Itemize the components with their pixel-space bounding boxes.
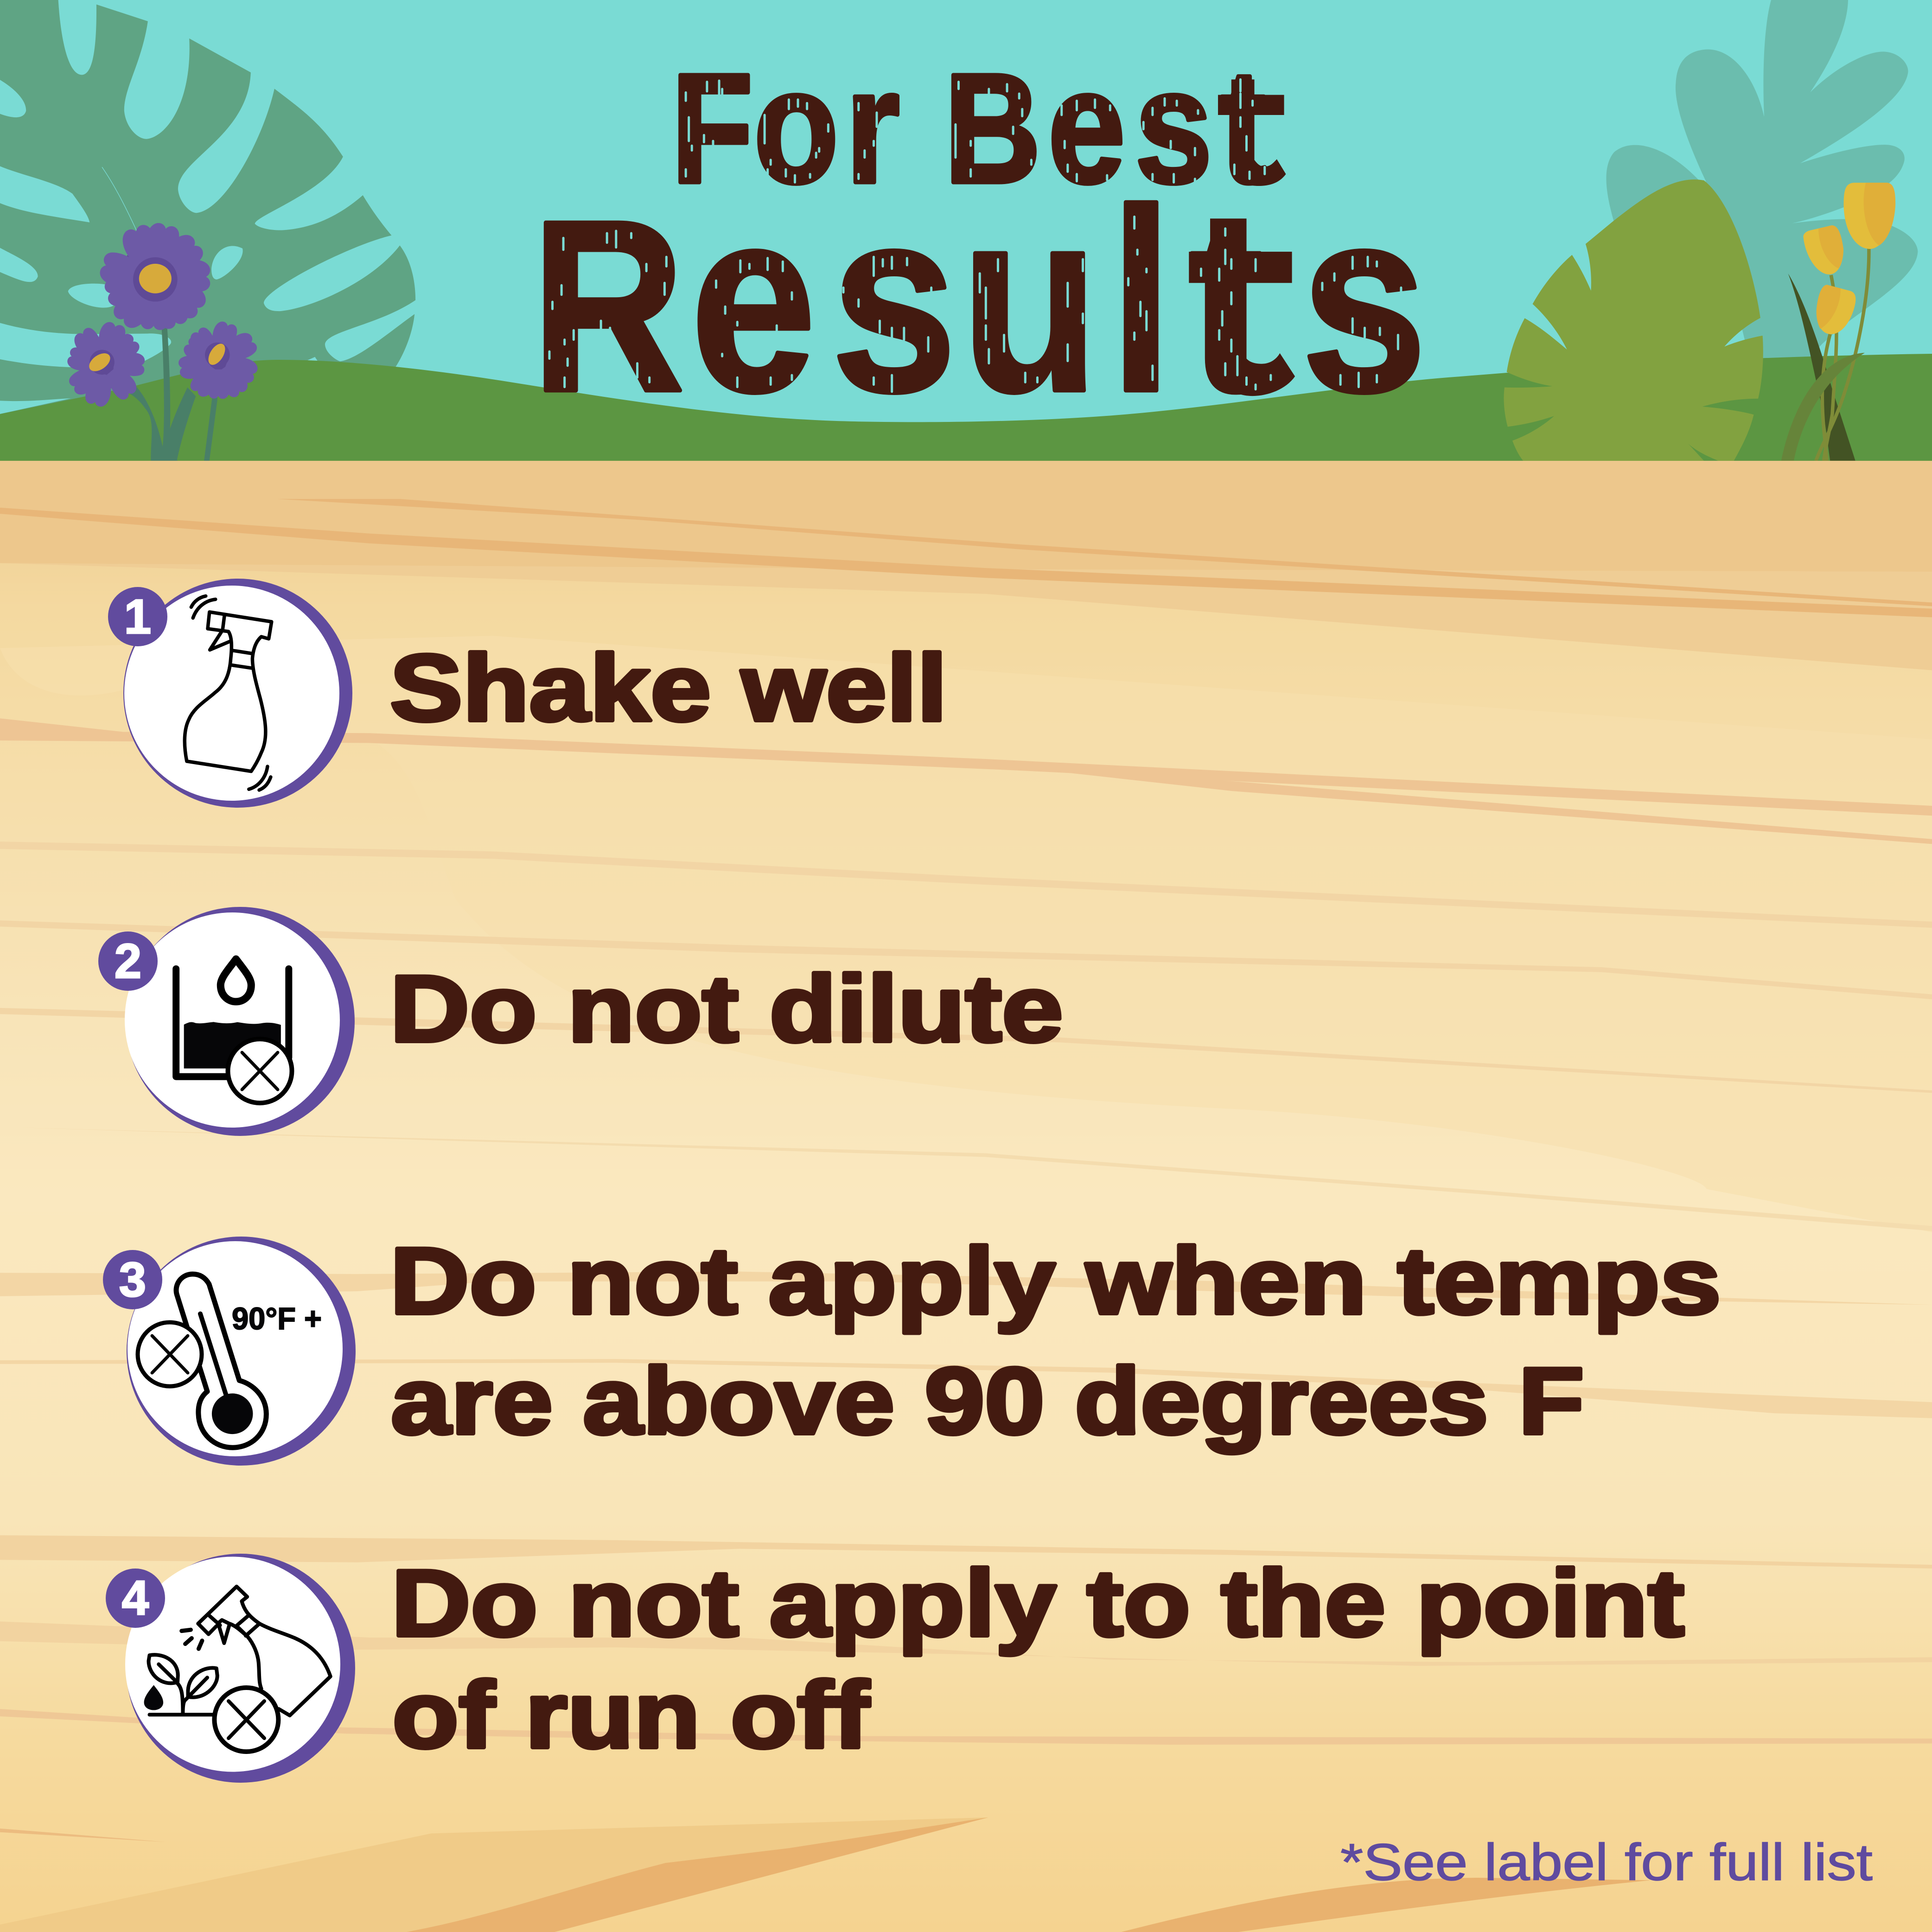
wood grain streaks (0, 461, 1932, 1932)
dark grass blade (1788, 274, 1855, 461)
back teal leaf, right (1606, 0, 1918, 373)
footnote: *See label for full list (1340, 1833, 1873, 1891)
title: For Best: est (1048, 36, 1267, 217)
title: For Best: F (671, 42, 753, 216)
wood panel background (0, 461, 1932, 1932)
badge: number 2 (98, 931, 158, 991)
badge: number 4 (106, 1569, 165, 1628)
step 2: icon disc with water beaker (98, 907, 355, 1136)
icon: spray bottle with shake marks (185, 596, 272, 790)
icon: crossed circle (228, 1039, 292, 1103)
step 4: icon disc with plant and spray (106, 1554, 355, 1783)
step 4 text: Do not apply to the point (391, 1550, 1684, 1656)
step 3 text: Do not apply when temps (390, 1228, 1721, 1334)
step 3: icon disc with thermometer (103, 1237, 356, 1466)
step 1 text: Shake well (390, 635, 947, 741)
step 4 text: of run off (392, 1662, 870, 1768)
tulip, middle (1803, 225, 1843, 274)
icon label: 90°F +: 90°F + (232, 1301, 322, 1336)
step 1: icon disc with spray bottle (108, 579, 352, 808)
large purple flower (97, 221, 211, 333)
icon: thermometer (176, 1274, 266, 1447)
icon: beaker with water drop (176, 959, 289, 1077)
tulip stems (1816, 249, 1869, 461)
front green leaf (1504, 179, 1763, 461)
badge: number 1 (108, 587, 167, 646)
sky background (0, 0, 1932, 462)
title: Results: esults (690, 156, 1427, 446)
flower stems (126, 325, 217, 461)
badge: number 2: 2 (115, 934, 141, 988)
title letter t crossbars and tails (1189, 79, 1295, 396)
badge: number 3 (103, 1250, 162, 1309)
badge: number 3: 3 (119, 1253, 146, 1307)
tulip, large (1843, 183, 1895, 249)
step 3 text: are above 90 degrees F (391, 1348, 1584, 1454)
icon: crossed circle (138, 1322, 202, 1386)
step 3 text (390, 1228, 1721, 1454)
icon: spray bottle over plant (144, 1587, 331, 1715)
badge: number 1: 1 (124, 590, 151, 644)
green hill (0, 354, 1932, 462)
title distress specks (549, 79, 1401, 392)
title: For Best: or (753, 36, 938, 217)
step 4 text (391, 1550, 1684, 1768)
title: Results: R (531, 170, 685, 442)
tulip, lower (1817, 285, 1855, 334)
small purple flower, left (66, 320, 145, 408)
right foliage: green leaf, blades and tulips (1504, 179, 1895, 461)
monstera leaf, left (0, 0, 415, 414)
icon: crossed circle (214, 1688, 278, 1752)
small purple flower, right (177, 320, 260, 400)
title: For Best: B (944, 42, 1041, 216)
badge: number 4: 4 (122, 1571, 149, 1625)
step 2 text: Do not dilute (390, 956, 1063, 1062)
curved grass blade (1781, 353, 1865, 461)
flowers, left (66, 221, 260, 461)
